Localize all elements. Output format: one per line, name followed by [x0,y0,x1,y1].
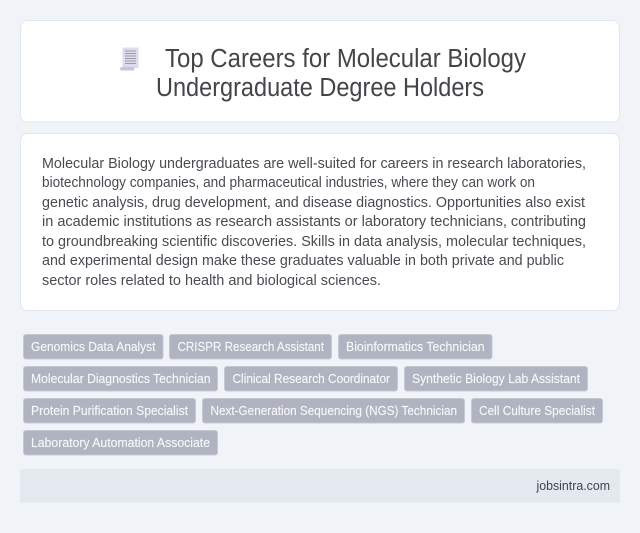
tag: Molecular Diagnostics Technician [31,371,210,386]
tag list: careers [24,334,602,455]
tag [24,398,196,423]
tag: CRISPR Research Assistant [178,339,324,354]
tag: Cell Culture Specialist [479,403,595,418]
tag [472,398,602,423]
text block: description paragraph: to groundbreaking scientific discoveries. Skills in data analysis, molecular techniques, [42,233,586,250]
tag [170,334,332,359]
tag: Next-Generation Sequencing (NGS) Technician [210,403,457,418]
tag: Laboratory Automation Associate [31,435,210,450]
footer text: source: jobsintra.com [536,479,610,493]
text block: description paragraph: genetic analysis, drug development, and disease diagnostics. Opportunities also exist [42,194,586,211]
title: Top Careers for Molecular Biology [165,45,526,73]
panel: title card [20,20,620,122]
text block: description paragraph: in academic institutions as research assistants or laboratory technicians, contributing [42,213,586,230]
panel: description [20,134,620,310]
title [156,45,526,102]
tag: Genomics Data Analyst [31,339,156,354]
tag [338,334,492,359]
tag [24,366,218,391]
tag [24,334,163,359]
tag: Bioinformatics Technician [346,339,484,354]
icon: document scroll [120,48,138,70]
tag [202,398,464,423]
text block: description paragraph: sector roles related to health and biological sciences. [42,272,381,289]
text block: description paragraph: biotechnology companies, and pharmaceutical industries, where they can work on [42,174,535,191]
tag: Protein Purification Specialist [31,403,188,418]
tag [24,430,218,455]
text block: description paragraph: Molecular Biology undergraduates are well-suited for careers in research laboratories, [42,155,586,172]
title: Undergraduate Degree Holders [156,74,484,102]
tag [224,366,398,391]
text block: description paragraph: and experimental design make these graduates valuable in both private and public [42,252,564,269]
text block: description paragraph [42,155,586,289]
tag: Clinical Research Coordinator [232,371,391,386]
tag [404,366,588,391]
footer [20,469,620,502]
tag: Synthetic Biology Lab Assistant [412,371,580,386]
